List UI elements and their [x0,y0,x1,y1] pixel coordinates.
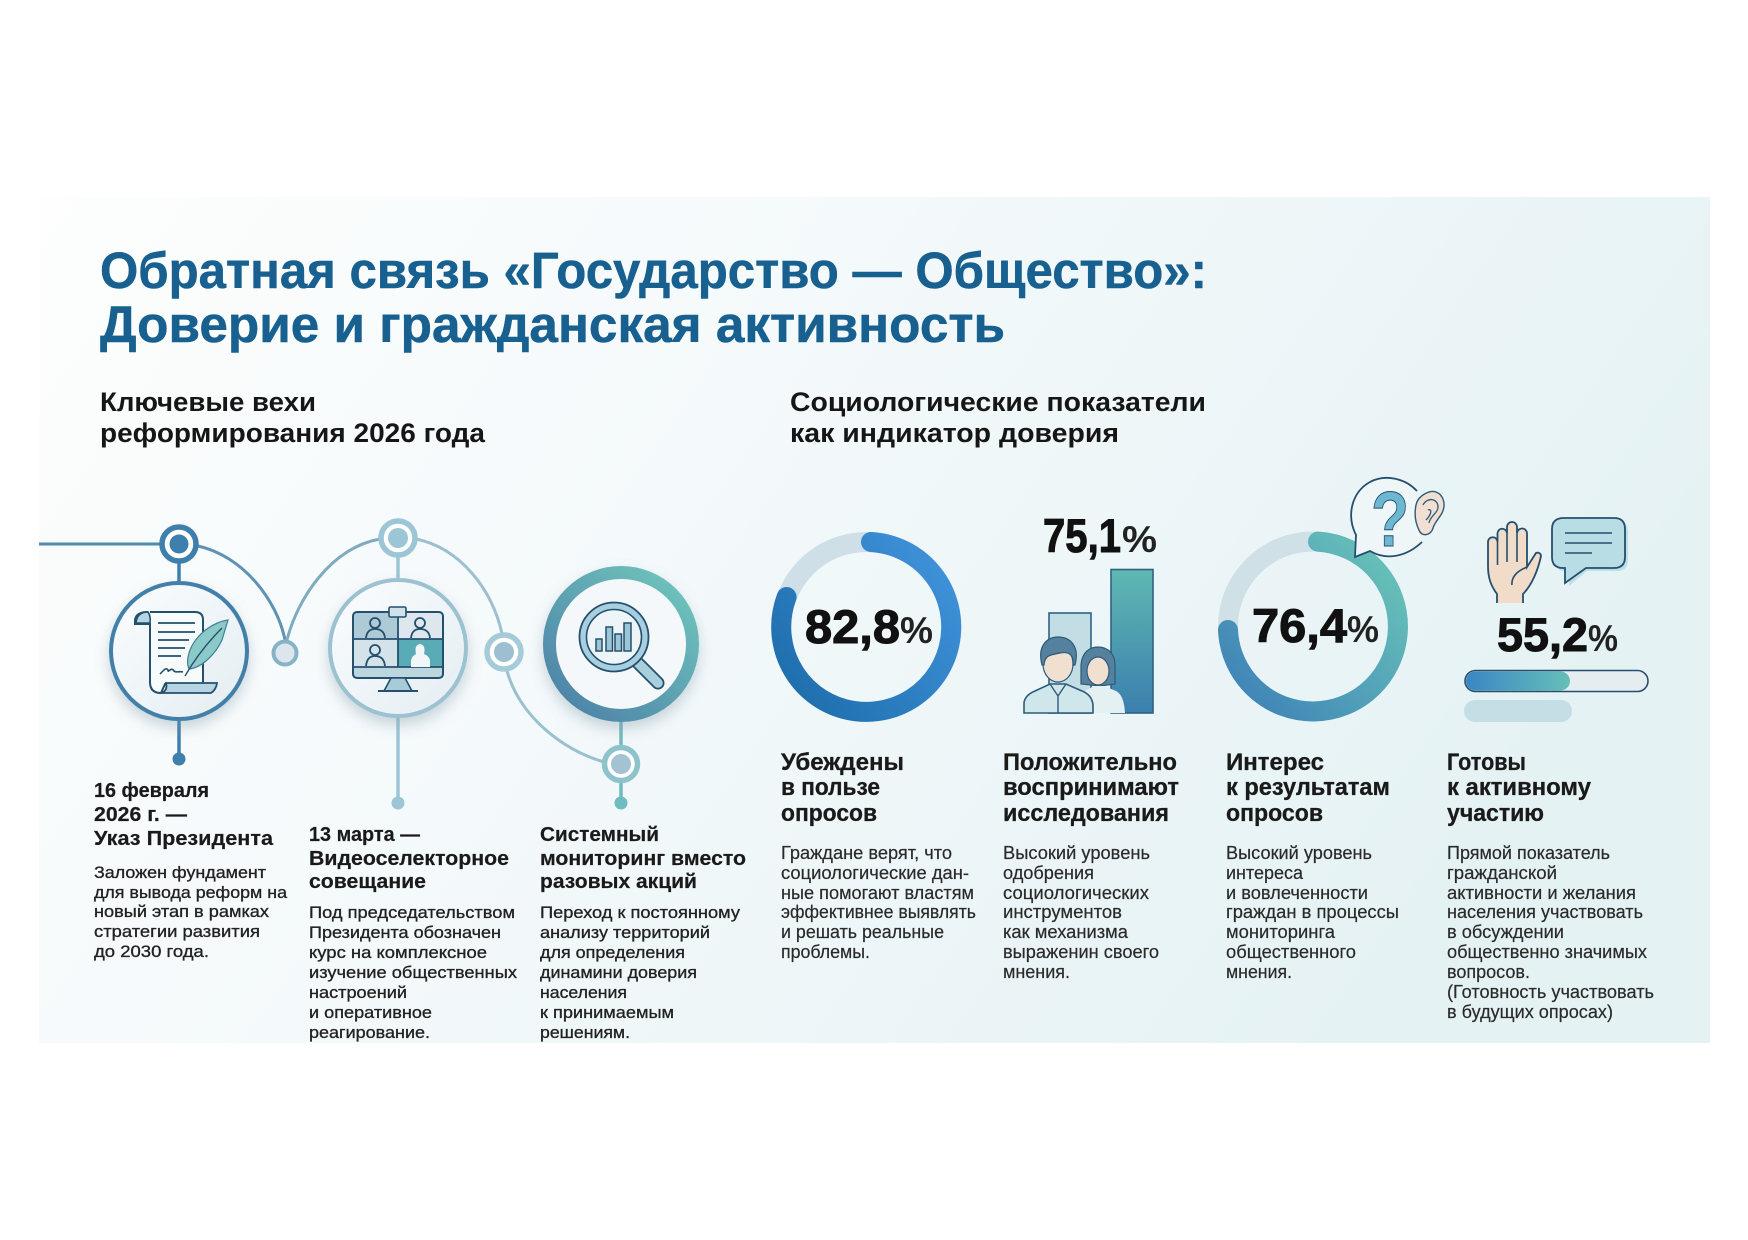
indicator 4 text: к активному [1447,774,1592,801]
chart: donut 76,4% [1228,542,1398,712]
icon: raised hand [1488,522,1541,603]
end dot 1 [172,752,186,766]
chart: bars with people 75,1%: 75,1 [1043,509,1121,562]
indicator 2 text: мнения. [1003,962,1070,982]
milestone 1 text: стратегии развития [94,922,260,941]
indicator 3 text: общественного [1226,942,1356,962]
indicator 3 text: мнения. [1226,962,1292,982]
indicator 3 text: к результатам [1226,774,1390,801]
milestone 2 text: курс на комплексное [309,943,487,962]
indicator 4 text: общественно значимых [1447,942,1647,962]
timeline node: small junction [274,642,296,664]
milestone 1 text: новый этап в рамках [94,902,270,921]
chart: progress bar 55,2%: % [1588,618,1618,659]
indicator 1 text: проблемы. [781,942,870,962]
indicator 4 text: активности и желания [1447,883,1636,903]
milestone 3 text [540,823,746,1042]
indicator 1 text: и решать реальные [781,922,944,942]
milestone 2 text: совещание [309,870,426,893]
title: Обратная связь «Государство — Общество»: [100,242,1207,299]
indicator 2 text [1003,749,1179,982]
milestone 3 text: динамини доверия [540,963,697,982]
milestone 2 text: Под председательством [309,903,515,922]
milestone 3 text: решениям. [540,1023,630,1042]
icon: decree scroll with quill [111,583,247,719]
indicator 2 text: инструментов [1003,902,1122,922]
indicator 1 text: эффективнее выявлять [781,902,976,922]
timeline connector path [39,539,621,803]
timeline node 2 [381,521,415,555]
chart: progress bar 55,2%: 55,2 [1497,608,1588,661]
heading: sociological indicators: Социологические показатели [790,387,1206,417]
indicator 1 text: Граждане верят, что [781,843,952,863]
milestone 2 text: 13 марта — [309,823,420,846]
indicator 3 text: интереса [1226,863,1304,883]
indicator 4 text: в будущих опросах) [1447,1002,1613,1022]
indicator 4 text: Готовы [1447,749,1526,776]
indicator 1 text: ные помогают властям [781,883,974,903]
heading: sociological indicators [790,387,1206,448]
milestone 3 text: для определения [540,943,685,962]
indicator 3 text: Интерес [1226,749,1324,776]
milestone 3 text: Переход к постоянному [540,903,741,922]
milestone 1 text: Заложен фундамент [94,863,266,882]
indicator 2 text: выраженин своего [1003,942,1159,962]
indicator 4 text: населения участвовать [1447,902,1643,922]
timeline node 1 [162,527,196,561]
indicator 3 text: мониторинга [1226,922,1336,942]
chart: donut 82,8%: % [900,610,933,651]
chart: donut 76,4%: % [1347,609,1379,650]
heading: sociological indicators: как индикатор доверия [790,418,1119,448]
title [100,242,1207,353]
indicator 3 text: граждан в процессы [1226,902,1399,922]
milestone 3 text: Системный [540,823,659,846]
heading: key milestones: реформирования 2026 года [100,418,486,448]
icon: video conference monitor [330,580,466,716]
indicator 4 text: участию [1447,800,1544,827]
indicator 2 text: воспринимают [1003,774,1179,801]
chart: progress bar 55,2% [1464,608,1648,722]
milestone 1 text: для вывода реформ на [94,883,288,902]
milestone 3 text: к принимаемым [540,1003,674,1022]
indicator 4 text: в обсуждении [1447,922,1564,942]
milestone 2 text: изучение общественных [309,963,518,982]
indicator 2 text: как механизма [1003,922,1129,942]
heading: key milestones: Ключевые вехи [100,387,316,417]
milestone 2 text: Президента обозначен [309,923,501,942]
title: Доверие и гражданская активность [100,296,1005,353]
milestone 2 text: и оперативное [309,1003,432,1022]
icon: magnifier over bar chart [550,572,692,716]
indicator 2 text: одобрения [1003,863,1094,883]
indicator 3 text: опросов [1226,800,1323,827]
milestone 1 text: до 2030 года. [94,942,209,961]
icon: question bubble with ear: ? [1371,475,1409,563]
indicator 2 text: социологических [1003,883,1149,903]
chart: donut 76,4%: 76,4 [1252,599,1347,652]
chart: bars with people 75,1%: % [1122,519,1157,560]
chart: donut 82,8% [781,542,952,712]
chart: bars with people 75,1% [1024,509,1157,713]
indicator 2 text: исследования [1003,800,1169,827]
icon: question bubble with ear [1351,475,1444,563]
end dot 2 [392,796,404,810]
milestone 3 text: мониторинг вместо [540,847,746,870]
indicator 4 text: вопросов. [1447,962,1530,982]
milestone 1 text: 16 февраля [94,779,209,802]
indicator 3 text [1226,749,1399,982]
milestone 1 text: 2026 г. — [94,803,188,826]
indicator 2 text: Положительно [1003,749,1177,776]
milestone 3 text: разовых акций [540,870,697,893]
timeline node 3 [487,635,521,669]
milestone 3 text: анализу территорий [540,923,710,942]
milestone 3 text: населения [540,983,627,1002]
panel: infographic background [39,197,1710,1043]
indicator 4 text: Прямой показатель [1447,843,1610,863]
indicator 1 text [781,749,976,962]
indicator 3 text: Высокий уровень [1226,843,1372,863]
icon: chat bubble [1552,518,1628,586]
end dot 3 [614,796,628,810]
milestone 1 text [94,779,288,961]
milestone 2 text: Видеоселекторное [309,847,509,870]
indicator 4 text [1447,749,1654,1022]
indicator 1 text: социологические дан- [781,863,969,883]
indicator 2 text: Высокий уровень [1003,843,1150,863]
indicator 1 text: опросов [781,800,877,827]
timeline node 4 [604,748,638,780]
indicator 1 text: Убеждены [781,749,904,776]
indicator 1 text: в пользе [781,774,880,801]
indicator 4 text: (Готовность участвовать [1447,982,1654,1002]
milestone 2 text [309,823,518,1042]
milestone 2 text: настроений [309,983,407,1002]
milestone 1 text: Указ Президента [94,827,274,850]
heading: key milestones [100,387,486,448]
milestone 2 text: реагирование. [309,1023,430,1042]
chart: donut 82,8%: 82,8 [805,600,900,653]
indicator 3 text: и вовлеченности [1226,883,1368,903]
indicator 4 text: гражданской [1447,863,1557,883]
